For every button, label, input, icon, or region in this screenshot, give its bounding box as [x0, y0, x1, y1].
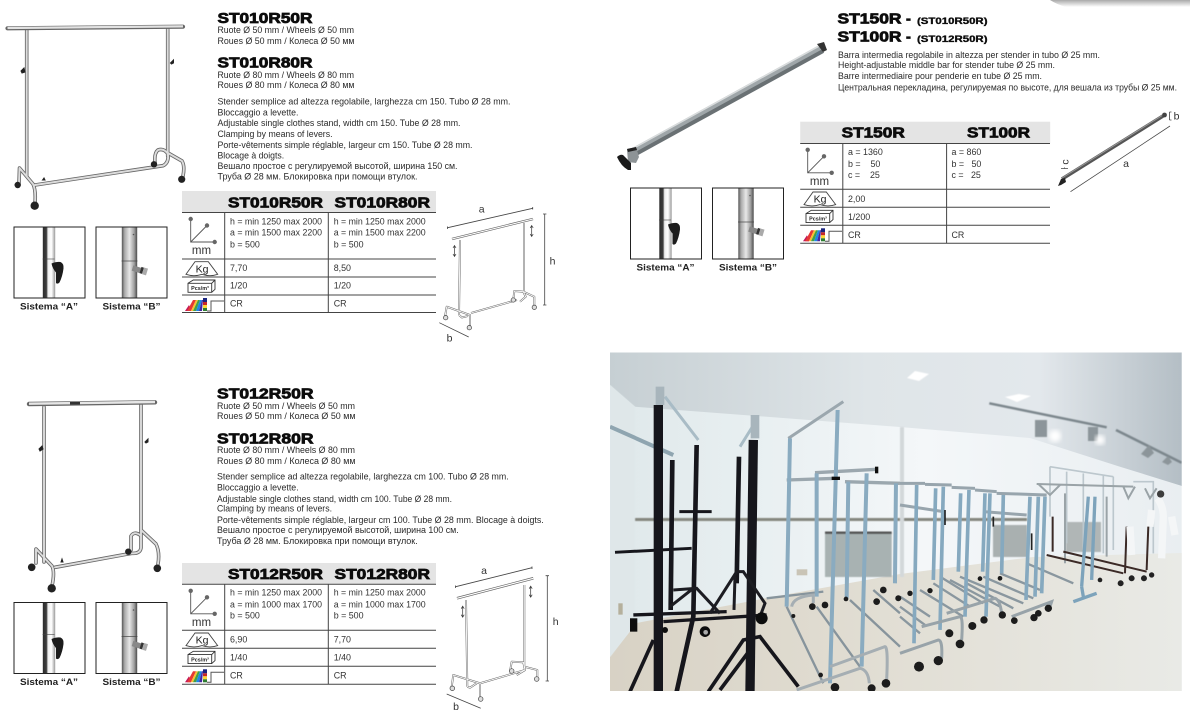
spec table: ST150R / ST100R: ST150R: [842, 126, 905, 142]
wheels text 50: [218, 25, 354, 46]
caption: Sistema B: Sistema “B”: [102, 300, 160, 312]
heading dash and reference ST012R50R: [906, 30, 988, 46]
dimension drawing: middle bar: c: [1060, 159, 1072, 165]
spec table: ST012R: Kg: [196, 635, 209, 647]
heading: ST010R80R: ST010R80R: [218, 56, 313, 72]
dimension drawing: middle bar: [1058, 110, 1180, 192]
description text: [218, 97, 510, 182]
spec table: ST012R: mm: [192, 617, 211, 629]
spec table: ST010R: ST010R80R: [334, 196, 431, 212]
dimension drawing: ST010R: h: [550, 256, 556, 268]
panel: ST012R adjustable stand: [14, 386, 559, 713]
spec table: ST010R: a = min 1500 max 2200: [230, 228, 322, 238]
dimension drawing: ST012R: [447, 565, 559, 713]
heading: ST150R: ST150R: [838, 12, 902, 28]
black racks left: [610, 387, 807, 692]
ceiling track and spotlights: [907, 371, 1182, 465]
dimension drawing: ST010R: [439, 204, 556, 344]
floor: [610, 553, 1182, 692]
spec table: ST010R: CR: [334, 299, 347, 309]
dimension drawing: ST010R: a: [479, 204, 485, 216]
far racks and mannequins: [1037, 467, 1175, 602]
description text: Clamping by means of levers.: [218, 129, 332, 139]
spec table: ST150R / ST100R: Kg: [814, 194, 827, 206]
wheels text 80: [218, 70, 354, 90]
dimension drawing: ST012R: h: [553, 616, 559, 628]
spec table: ST010R: CR: [230, 299, 243, 309]
heading dash and reference ST012R50R: -: [906, 30, 911, 46]
spec table: ST150R / ST100R: b = 50: [848, 159, 880, 169]
spec table: ST010R: ST010R50R: [228, 196, 324, 212]
heading: ST100R: ST100R: [838, 30, 902, 46]
panel: showroom photo: [610, 352, 1182, 692]
wheels text 80: [217, 445, 356, 466]
heading dash and reference ST010R50R: [906, 12, 988, 28]
dimension drawing: ST012R: b: [453, 701, 459, 713]
spec table: ST010R: Pcs/m³: [191, 286, 209, 292]
wheels text 80: Ruote Ø 80 mm / Wheels Ø 80 mm: [217, 445, 355, 455]
heading: ST010R50R: ST010R50R: [218, 11, 313, 27]
heading: ST012R50R: ST012R50R: [217, 386, 314, 402]
description text: Porte-vêtements simple réglable, largeur cm 150. Tube Ø 28 mm.: [218, 140, 472, 150]
spec table: ST150R / ST100R: ST100R: [967, 126, 1031, 142]
description text: Вешало простое с регулируемой высотой, ширина 150 см.: [218, 161, 458, 171]
product photo: ST012R stand: [28, 402, 161, 592]
description text: Barre intermediaire pour penderie en tube Ø 25 mm.: [838, 71, 1042, 81]
description text: Clamping by means of levers.: [217, 503, 332, 513]
description text: [838, 50, 1177, 92]
wheels text 50: Ruote Ø 50 mm / Wheels Ø 50 mm: [217, 401, 355, 411]
ceiling: [610, 352, 1182, 486]
heading dash and reference ST012R50R: (ST012R50R): [917, 34, 988, 45]
corner shadow: [1050, 0, 1190, 7]
spec table: ST012R: ST012R50R: [228, 567, 324, 583]
wheels text 50: Ruote Ø 50 mm / Wheels Ø 50 mm: [218, 25, 354, 35]
spec table: ST010R: b = 500: [230, 240, 260, 250]
spec table: ST012R: a = min 1000 max 1700: [334, 599, 426, 609]
heading dash and reference ST010R50R: (ST010R50R): [917, 16, 988, 27]
spec table: ST150R / ST100R: Pcs/m³: [809, 216, 827, 222]
caption: Sistema A: Sistema “A”: [20, 676, 78, 687]
spec table: ST150R / ST100R: a = 1360: [848, 147, 883, 157]
panel: ST150R / ST100R middle bar: [617, 12, 1180, 272]
spec table: ST012R: Pcs/m³: [191, 657, 209, 663]
spec table: ST150R / ST100R: b = 50: [952, 159, 981, 169]
lock detail: Sistema A: [14, 602, 85, 674]
spec table: ST012R: 1/40: [230, 652, 247, 662]
description text: Blocage à doigts.: [218, 150, 284, 160]
spec table: ST012R: h = min 1250 max 2000: [334, 588, 426, 598]
dimension drawing: ST012R: a: [481, 565, 487, 577]
spec table: ST012R: CR: [230, 671, 243, 681]
spec table: ST150R / ST100R: c = 25: [952, 170, 981, 180]
caption: Sistema A: Sistema “A”: [636, 262, 694, 272]
spec table: ST012R: b = 500: [334, 610, 364, 620]
spec table: ST010R: Kg: [196, 263, 209, 275]
spec table: ST150R / ST100R: mm: [810, 176, 829, 188]
caption: Sistema B: Sistema “B”: [719, 262, 777, 272]
lock detail: Sistema B: [96, 602, 167, 674]
heading dash and reference ST010R50R: -: [906, 12, 911, 28]
wall background: [610, 385, 1182, 657]
description text: Adjustable single clothes stand, width cm 100. Tube Ø 28 mm.: [217, 494, 452, 504]
dimension drawing: middle bar: b: [1174, 110, 1180, 122]
spec table: ST012R: CR: [334, 671, 347, 681]
product photo: middle bar: [617, 42, 827, 170]
spec table: ST150R / ST100R: 2,00: [848, 194, 865, 204]
spec table: ST150R / ST100R: c = 25: [848, 170, 880, 180]
product photo: ST010R stand: [8, 26, 185, 210]
description text: [217, 472, 544, 546]
wheels text 80: Roues Ø 80 mm / Колеса Ø 80 мм: [217, 456, 356, 466]
lock detail: Sistema B: [712, 188, 784, 259]
wheels text 50: Roues Ø 50 mm / Колеса Ø 50 мм: [218, 36, 354, 46]
description text: Вешало простое с регулируемой высотой, ширина 100 см.: [217, 525, 459, 535]
caption: Sistema B: Sistema “B”: [102, 676, 160, 687]
spec table: ST010R: [182, 191, 436, 312]
spec table: ST010R: h = min 1250 max 2000: [230, 216, 322, 226]
spec table: ST012R: 1/40: [334, 652, 351, 662]
chrome racks centre: [767, 402, 901, 692]
chrome racks right: [900, 483, 1073, 672]
spec table: ST012R: 7,70: [334, 634, 351, 644]
spec table: ST150R / ST100R: a = 860: [952, 147, 981, 157]
heading: ST012R80R: ST012R80R: [217, 431, 314, 447]
lock detail: Sistema A: [630, 188, 702, 259]
spec table: ST012R: h = min 1250 max 2000: [230, 588, 322, 598]
spec table: ST150R / ST100R: CR: [952, 230, 964, 240]
wheels text 80: Ruote Ø 80 mm / Wheels Ø 80 mm: [218, 70, 354, 80]
spec table: ST012R: a = min 1000 max 1700: [230, 599, 322, 609]
wall details: [610, 385, 1101, 657]
dimension drawing: ST010R: b: [447, 332, 453, 344]
description text: Porte-vêtements simple réglable, largeur cm 100. Tube Ø 28 mm. Blocage à doigts.: [217, 515, 544, 525]
dimension drawing: middle bar: a: [1123, 158, 1129, 170]
spec table: ST012R: ST012R80R: [334, 567, 431, 583]
description text: Stender semplice ad altezza regolabile, larghezza cm 100. Tubo Ø 28 mm.: [217, 472, 509, 482]
spec table: ST010R: a = min 1500 max 2200: [334, 228, 426, 238]
description text: Труба Ø 28 мм. Блокировка при помощи втулок.: [218, 172, 418, 182]
description text: Height-adjustable middle bar for stender tube Ø 25 mm.: [838, 60, 1055, 70]
wheels text 50: [217, 401, 356, 421]
spec table: ST012R: b = 500: [230, 610, 260, 620]
lock detail: Sistema B: [96, 227, 167, 298]
spec table: ST150R / ST100R: [800, 122, 1050, 243]
description text: Adjustable single clothes stand, width cm 150. Tube Ø 28 mm.: [218, 118, 460, 128]
wheels text 50: Roues Ø 50 mm / Колеса Ø 50 мм: [217, 411, 356, 421]
spec table: ST012R: [182, 563, 436, 684]
spec table: ST150R / ST100R: 1/200: [848, 212, 870, 222]
wheels text 80: Roues Ø 80 mm / Колеса Ø 80 мм: [218, 80, 354, 90]
panel: ST010R adjustable stand: [8, 11, 556, 344]
caption: Sistema A: Sistema “A”: [20, 300, 78, 312]
description text: Центральная перекладина, регулируемая по высоте, для вешала из трубы Ø 25 мм.: [838, 82, 1177, 92]
spec table: ST010R: 1/20: [334, 280, 351, 290]
description text: Bloccaggio a levette.: [218, 108, 298, 118]
description text: Труба Ø 28 мм. Блокировка при помощи втулок.: [217, 536, 418, 546]
spec table: ST010R: 1/20: [230, 280, 247, 290]
lock detail: Sistema A: [14, 227, 85, 298]
spec table: ST150R / ST100R: CR: [848, 230, 861, 240]
spec table: ST010R: 8,50: [334, 263, 351, 273]
spec table: ST010R: mm: [192, 245, 211, 257]
description text: Bloccaggio a levette.: [217, 483, 299, 493]
spec table: ST010R: h = min 1250 max 2000: [334, 216, 426, 226]
description text: Barra intermedia regolabile in altezza per stender in tubo Ø 25 mm.: [838, 50, 1100, 60]
spec table: ST010R: 7,70: [230, 263, 247, 273]
spec table: ST012R: 6,90: [230, 634, 247, 644]
description text: Stender semplice ad altezza regolabile, larghezza cm 150. Tubo Ø 28 mm.: [218, 97, 510, 107]
spec table: ST010R: b = 500: [334, 240, 364, 250]
